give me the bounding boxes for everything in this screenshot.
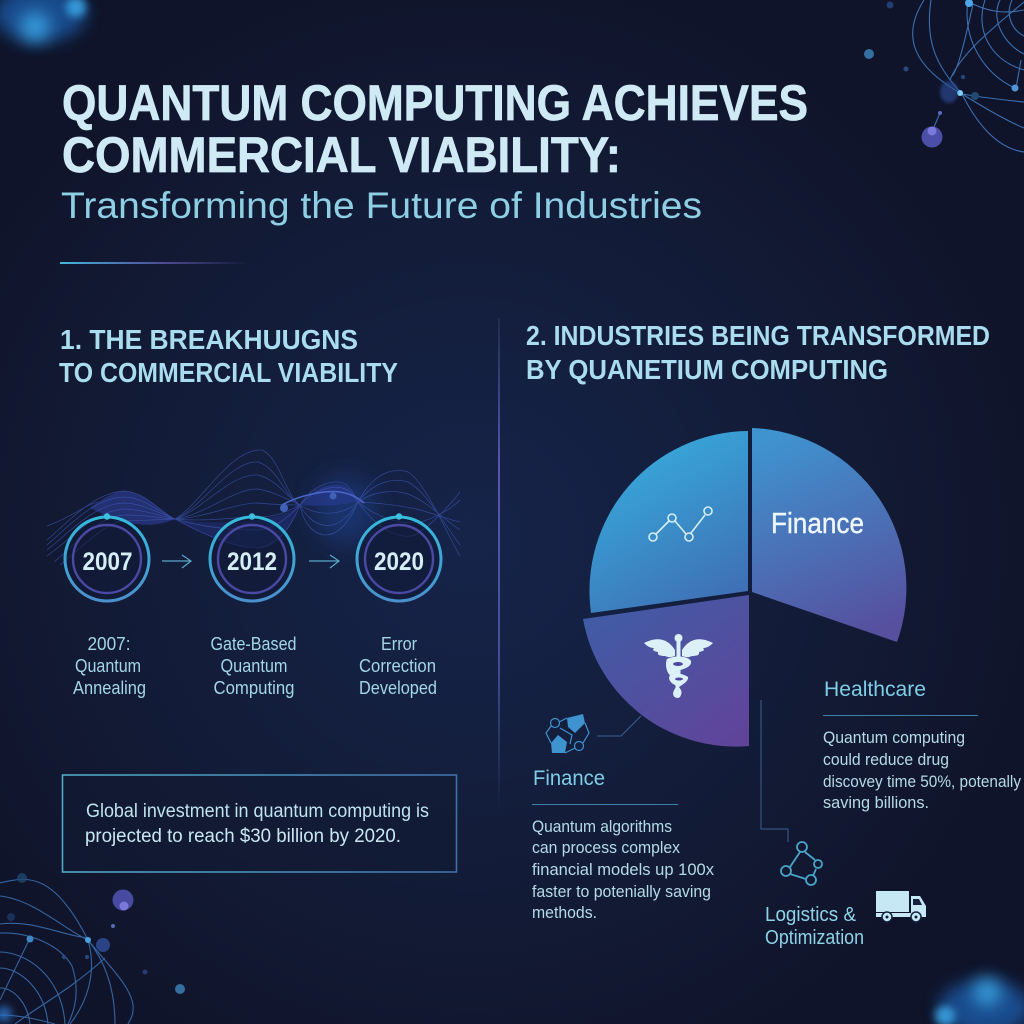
network nodes: bottom left (0, 873, 185, 1022)
timeline label: 2007: Quantum (75, 656, 141, 676)
rule: healthcare (823, 715, 978, 716)
subtitle: Transforming the Future of Industries (61, 185, 702, 226)
timeline label: 2020 (359, 634, 437, 698)
leader line: logistics (761, 700, 788, 842)
timeline label: 2020: Correction (359, 656, 436, 676)
timeline node: 2012: 2012 (227, 548, 277, 576)
section heading 1: TO COMMERCIAL VIABILITY (59, 357, 398, 388)
corner glow: top left (0, 0, 86, 42)
heading: logistics (765, 904, 864, 949)
rule: finance (532, 804, 678, 805)
timeline node: 2007 (65, 513, 149, 601)
callout box (62, 775, 456, 872)
heading: healthcare: Healthcare (824, 678, 926, 701)
icon: finance network (546, 714, 589, 753)
main title: QUANTUM COMPUTING ACHIEVES (62, 75, 808, 131)
timeline label: 2012: Quantum (220, 656, 288, 676)
slice label: Finance: Finance (771, 508, 864, 540)
icon: line chart (649, 507, 712, 541)
text: finance: financial models up 100x (532, 861, 715, 879)
heading: finance: Finance (533, 767, 605, 790)
timeline node: 2020 (357, 513, 441, 601)
vertical divider (498, 318, 500, 810)
timeline label: 2007 (73, 634, 146, 698)
text: healthcare: saving billions. (823, 794, 929, 812)
timeline label: 2012: Gate-Based (210, 634, 296, 654)
wave glow behind timeline (90, 476, 375, 548)
timeline label: 2007: 2007: (88, 634, 130, 654)
pie chart (583, 428, 906, 747)
timeline node: 2020: 2020 (374, 548, 424, 576)
text: healthcare: could reduce drug (823, 751, 949, 769)
text: healthcare: Quantum computing (823, 729, 965, 747)
section heading 1 (59, 324, 398, 388)
slice: bottom left with caduceus (583, 595, 749, 747)
main title: COMMERCIAL VIABILITY: (62, 127, 621, 183)
text: finance (532, 818, 715, 922)
heading: logistics: Logistics & (765, 904, 857, 926)
icon: caduceus (644, 634, 713, 698)
timeline node: 2007: 2007 (82, 548, 132, 576)
icon: truck (876, 891, 926, 922)
main title (62, 75, 808, 183)
wave lines behind timeline (47, 450, 460, 565)
callout box: projected to reach $30 billion by 2020. (85, 826, 401, 847)
text: finance: faster to potenially saving (532, 883, 711, 901)
text: finance: methods. (532, 904, 597, 922)
heading: logistics: Optimization (765, 927, 864, 949)
timeline label: 2012: Computing (214, 678, 294, 698)
network nodes: top right (864, 0, 1018, 148)
icon: logistics network (781, 842, 822, 885)
slice: top left with line chart icon (589, 431, 748, 613)
slice: top right Finance (752, 428, 906, 642)
timeline label: 2007: Annealing (73, 678, 146, 698)
callout box: Global investment in quantum computing is (86, 801, 429, 822)
text: finance: Quantum algorithms (532, 818, 672, 836)
timeline label: 2020: Error (381, 634, 417, 654)
section heading 2 (526, 320, 990, 385)
text: healthcare (823, 729, 1022, 812)
corner glow: bottom right (935, 978, 1024, 1024)
timeline label: 2020: Developed (359, 678, 437, 698)
timeline node: 2012 (210, 513, 294, 601)
wave highlight and nodes (280, 492, 364, 512)
arrow (162, 555, 191, 568)
section heading 1: 1. THE BREAKHUUGNS (60, 324, 358, 355)
title rule (60, 262, 248, 264)
arrow (309, 555, 339, 568)
leader line: finance (597, 716, 641, 736)
network decoration: bottom left (0, 879, 133, 1024)
text: finance: can process complex (532, 839, 681, 857)
section heading 2: BY QUANETIUM COMPUTING (526, 354, 888, 385)
timeline label: 2012 (210, 634, 296, 698)
network decoration: top right (913, 0, 1024, 152)
